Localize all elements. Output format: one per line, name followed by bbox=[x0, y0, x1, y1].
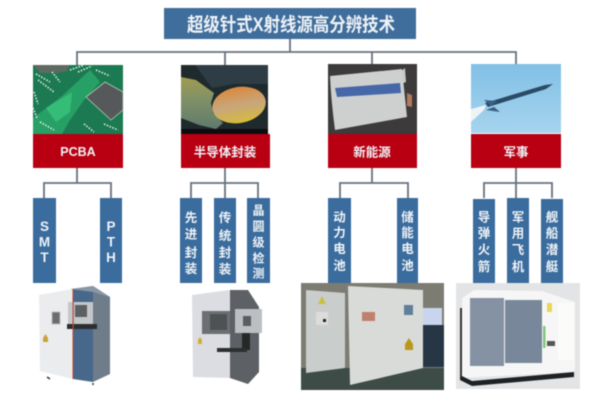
sub-box: ships and submarines: 潜 bbox=[546, 242, 559, 257]
sub-box: storage battery: 池 bbox=[401, 258, 414, 273]
sub-box: missiles and rockets bbox=[473, 199, 495, 283]
sub-box: traditional packaging: 装 bbox=[219, 262, 232, 276]
sub-box: traditional packaging: 传 bbox=[219, 210, 232, 225]
sub-box: SMT: T bbox=[40, 250, 49, 265]
sub-box: SMT: S bbox=[40, 219, 49, 234]
sub-box: missiles and rockets: 火 bbox=[478, 243, 491, 257]
machine: large inspection cabinet bbox=[456, 283, 580, 389]
sub-box: power battery: 电 bbox=[333, 242, 346, 256]
machine: X-ray inspection 1 bbox=[39, 286, 110, 385]
title: 超级针式X射线源高分辨技术 bbox=[187, 13, 395, 36]
sub-box: ships and submarines bbox=[541, 199, 563, 283]
sub-box: wafer-level inspection: 圆 bbox=[252, 220, 265, 234]
label: military: 军事 bbox=[503, 144, 529, 160]
label: PCBA: PCBA bbox=[60, 145, 96, 159]
sub-box: PTH: P bbox=[106, 219, 116, 234]
title bbox=[164, 8, 416, 39]
sub-box: missiles and rockets: 箭 bbox=[478, 259, 490, 274]
label: semiconductor packaging: 半导体封装 bbox=[194, 144, 257, 160]
sub-box: missiles and rockets: 导 bbox=[478, 210, 490, 224]
sub-box: advanced packaging: 先 bbox=[185, 210, 197, 225]
sub-box: advanced packaging: 装 bbox=[185, 261, 198, 276]
label: new energy: 新能源 bbox=[353, 144, 391, 160]
connector lines bbox=[44, 39, 552, 198]
sub-box: wafer-level inspection: 晶 bbox=[252, 204, 265, 218]
sub-box: storage battery: 储 bbox=[401, 210, 414, 224]
panel: semiconductor packaging bbox=[181, 65, 270, 168]
sub-box: military aircraft: 飞 bbox=[512, 243, 525, 257]
sub-box: PTH: H bbox=[106, 250, 116, 265]
sub-box: SMT: M bbox=[39, 234, 50, 250]
sub-box: military aircraft: 机 bbox=[512, 259, 525, 274]
sub-box: PTH: T bbox=[107, 234, 116, 250]
sub-box: wafer-level inspection: 级 bbox=[252, 234, 265, 250]
sub-box: wafer-level inspection: 检 bbox=[252, 250, 265, 266]
sub-box: traditional packaging: 统 bbox=[219, 228, 232, 243]
sub-box: power battery: 力 bbox=[333, 225, 346, 240]
sub-box: power battery: 池 bbox=[333, 258, 346, 273]
sub-box: missiles and rockets: 弹 bbox=[478, 226, 491, 240]
sub-box: SMT bbox=[33, 198, 56, 283]
sub-box: power battery: 动 bbox=[333, 210, 346, 224]
sub-box: wafer-level inspection bbox=[247, 198, 270, 283]
sub-box: storage battery bbox=[397, 198, 418, 283]
sub-box: ships and submarines: 艇 bbox=[546, 259, 559, 274]
sub-box: power battery bbox=[328, 198, 351, 283]
image: wafers bbox=[181, 65, 269, 134]
image: missile bbox=[471, 64, 561, 133]
sub-box: ships and submarines: 船 bbox=[546, 226, 559, 240]
machine: X-ray inspection 2 bbox=[192, 290, 262, 384]
image: battery bbox=[328, 64, 417, 134]
sub-box: PTH bbox=[100, 198, 122, 283]
sub-box: military aircraft: 用 bbox=[512, 226, 524, 240]
panel: PCBA bbox=[33, 65, 123, 168]
sub-box: advanced packaging: 封 bbox=[185, 245, 198, 260]
sub-box: ships and submarines: 舰 bbox=[546, 210, 559, 224]
panel: new energy bbox=[328, 64, 417, 168]
sub-box: advanced packaging: 进 bbox=[185, 228, 198, 242]
sub-box: traditional packaging bbox=[214, 198, 236, 283]
sub-box: traditional packaging: 封 bbox=[219, 245, 232, 260]
sub-box: military aircraft: 军 bbox=[512, 210, 524, 224]
sub-box: storage battery: 电 bbox=[401, 242, 414, 256]
sub-box: wafer-level inspection: 测 bbox=[252, 266, 265, 280]
panel: military bbox=[471, 64, 561, 168]
machine: shielded cabinet bbox=[301, 283, 444, 390]
sub-box: storage battery: 能 bbox=[401, 225, 414, 240]
sub-box: advanced packaging bbox=[180, 198, 202, 283]
image: circuit board bbox=[33, 65, 123, 134]
sub-box: military aircraft bbox=[507, 198, 529, 283]
